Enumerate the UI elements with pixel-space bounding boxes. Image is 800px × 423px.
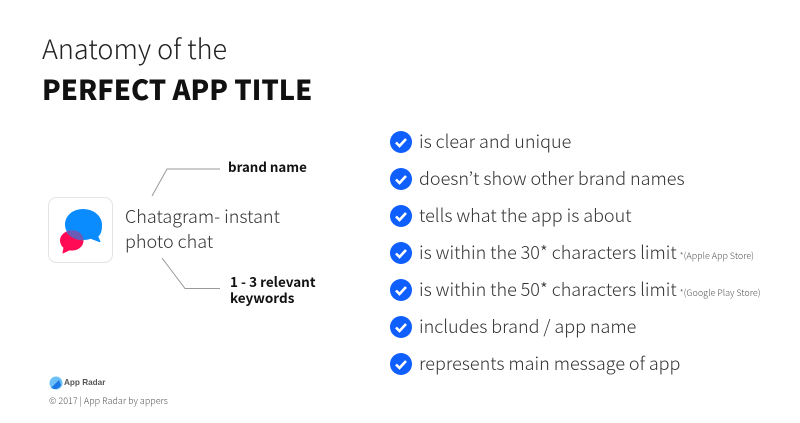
item: 50 character limit: is within the 50* characters limit *(Google Play Store)	[419, 276, 761, 302]
connector: keywords	[162, 258, 220, 289]
item: what the app is about: tells what the app is about	[419, 202, 632, 228]
panel: app title anatomy	[48, 157, 316, 306]
item: other brand names: doesn’t show other brand names	[419, 165, 685, 191]
label: keywords: 1 - 3 relevant	[230, 271, 316, 291]
app title example: photo chat	[125, 228, 213, 254]
item: brand or app name: includes brand / app name	[419, 313, 636, 339]
title	[42, 28, 312, 108]
footer	[49, 376, 168, 407]
title line two: PERFECT APP TITLE	[42, 68, 312, 108]
item: 30 character limit: is within the 30* characters limit *(Apple App Store)	[419, 239, 754, 265]
title line one: Anatomy of the	[42, 28, 227, 67]
icon: app icon with chat bubbles	[48, 197, 113, 263]
item: main message: represents main message of app	[419, 350, 680, 376]
app title example	[125, 203, 280, 254]
label: keywords: keywords	[230, 286, 294, 306]
connector: brand name	[152, 168, 220, 196]
label: keywords	[230, 271, 316, 306]
checklist	[390, 128, 761, 376]
copyright: © 2017 | App Radar by appers	[49, 394, 168, 407]
item: clear and unique: is clear and unique	[419, 128, 571, 154]
label: brand name: brand name	[228, 157, 307, 176]
app title example: Chatagram- instant	[125, 203, 280, 229]
logo wordmark: App Radar	[64, 378, 105, 387]
icon: App Radar logo	[50, 376, 62, 390]
